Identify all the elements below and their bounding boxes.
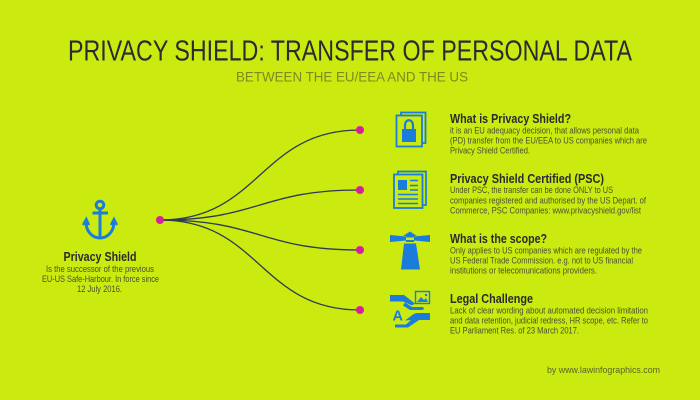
panel: what is privacy shield	[450, 111, 647, 156]
panel: legal challenge: Lack of clear wording about automated decision limitation	[450, 306, 648, 316]
panel: privacy shield summary: 12 July 2016.	[77, 284, 122, 294]
icon: lighthouse	[390, 232, 430, 270]
icon: certified documents	[394, 172, 426, 208]
panel: what is privacy shield: it is an EU adequacy decision, that allows personal data	[450, 126, 640, 136]
panel: privacy shield certified: Commerce, PSC Companies: www.privacyshield.gov/list	[450, 206, 641, 216]
icon: locked documents	[396, 112, 426, 146]
panel: what is the scope: What is the scope?	[450, 231, 547, 246]
panel: legal challenge	[450, 291, 648, 336]
panel: privacy shield certified: Privacy Shield Certified (PSC)	[450, 171, 604, 186]
panel: privacy shield certified: Under PSC, the transfer can be done ONLY to US	[450, 185, 613, 195]
panel: what is the scope: institutions or telecomunications providers.	[450, 266, 597, 276]
panel: privacy shield summary	[42, 249, 159, 294]
panel: legal challenge: Legal Challenge	[450, 291, 533, 306]
panel: what is privacy shield: What is Privacy Shield?	[450, 111, 571, 126]
connector curves	[160, 130, 360, 310]
panel: what is the scope: Only applies to US companies which are regulated by the	[450, 246, 642, 256]
icon: anchor	[83, 201, 117, 238]
icon: exchanging hands: A	[392, 308, 404, 324]
panel: legal challenge: EU Parliament Res. of 23 March 2017.	[450, 326, 579, 336]
panel: privacy shield summary: Privacy Shield	[64, 249, 136, 264]
panel: what is privacy shield: (PD) transfer from the EU/EEA to US companies which are	[450, 136, 647, 146]
panel: privacy shield summary: Is the successor of the previous	[46, 264, 154, 274]
connector dots	[156, 126, 364, 314]
footer credit: by www.lawinfographics.com	[547, 365, 660, 375]
panel: legal challenge: and data retention, judicial redress, HR scope, etc. Refer to	[450, 316, 648, 326]
subtitle: BETWEEN THE EU/EEA AND THE US	[236, 70, 468, 84]
panel: privacy shield certified: companies registered and authorised by the US Depart. of	[450, 196, 646, 206]
panel: privacy shield certified	[450, 171, 646, 216]
icon: exchanging hands	[390, 292, 430, 328]
panel: what is the scope	[450, 231, 642, 276]
panel: what is the scope: US Federal Trade Commission. e.g. not to US financial	[450, 256, 633, 266]
panel: privacy shield summary: EU-US Safe-Harbour. In force since	[42, 274, 159, 284]
panel: what is privacy shield: Privacy Shield Certified.	[450, 146, 530, 156]
